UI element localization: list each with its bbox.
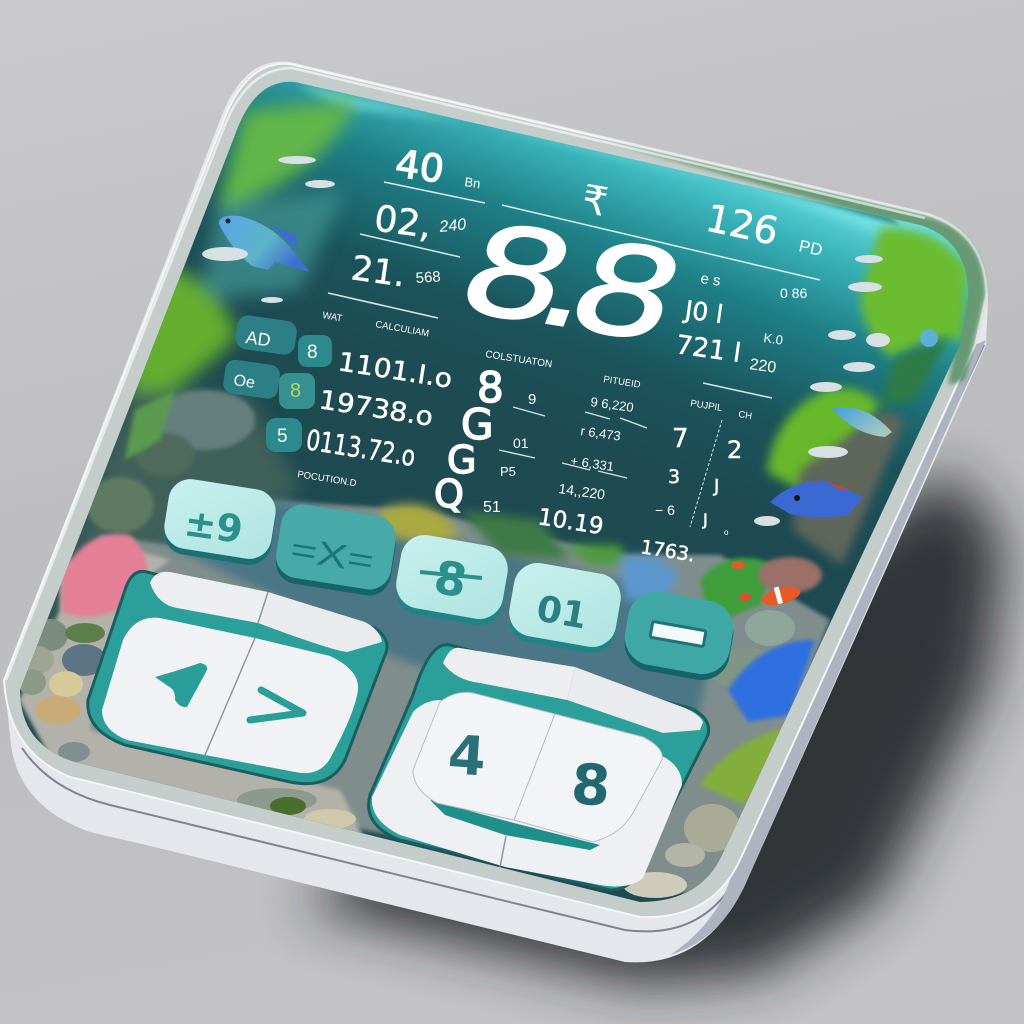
display readouts: 7	[672, 424, 689, 454]
floor	[20, 500, 830, 900]
display readouts: 2	[727, 436, 742, 464]
top row buttons	[161, 476, 738, 684]
lower surround key	[372, 700, 682, 886]
display readouts: 10.19	[536, 504, 605, 540]
display readouts: 14,,220	[558, 480, 606, 503]
display readouts: 0 86	[780, 285, 807, 301]
plants top left	[20, 100, 355, 690]
left arrow glyph	[155, 663, 207, 707]
display readouts	[297, 141, 824, 566]
display readouts: Q	[434, 472, 464, 516]
display readouts: Bn	[464, 174, 481, 191]
left keypad	[88, 571, 387, 784]
display readouts: PITUEID	[603, 374, 641, 391]
display readouts: 1763.	[639, 536, 696, 566]
display readouts: 721 l	[674, 330, 743, 369]
surface ripples	[295, 82, 930, 235]
display readouts: 51	[483, 499, 501, 516]
green and yellow plants mid	[380, 504, 680, 605]
display readouts: 126	[702, 196, 782, 254]
label 4: 4	[446, 723, 488, 789]
display readouts: o	[724, 528, 729, 537]
button: equals X equals: =X=	[288, 530, 377, 581]
display readouts: + 6,331	[570, 453, 615, 474]
display readouts: 0113.72.o	[304, 423, 418, 473]
fish top left blue	[219, 216, 310, 272]
display readouts: CH	[738, 409, 753, 422]
aquarium scene	[20, 82, 968, 902]
glass tint top right	[600, 140, 985, 385]
right rocks, corals, plants	[623, 557, 822, 898]
symbol glyph: ₹	[578, 178, 611, 225]
display readouts: 568	[415, 268, 441, 287]
display readouts: P5	[500, 464, 516, 479]
small teal keys: 5	[277, 426, 288, 447]
inner key 8	[514, 714, 662, 842]
right arrow glyph	[250, 690, 303, 720]
display readouts: 220	[748, 356, 777, 377]
keypad frame	[369, 645, 709, 890]
drop shadow	[300, 470, 1005, 985]
display readouts: 9 6,220	[590, 394, 635, 415]
display readouts: 9	[528, 391, 536, 408]
button: 8	[392, 531, 512, 629]
button: plus-minus 9: ±9	[182, 500, 246, 552]
label 8: 8	[569, 752, 612, 820]
button: plus-minus 9	[161, 476, 279, 568]
small teal keys: 8	[307, 342, 318, 363]
blue-grey centre floor	[162, 496, 710, 714]
teal inner band	[430, 800, 600, 850]
small teal keys: AD	[244, 327, 272, 350]
keypad frame	[88, 571, 387, 784]
right side readouts: e s	[699, 270, 722, 290]
display readouts: J0 l	[681, 295, 725, 329]
display readouts: J	[702, 510, 708, 529]
display readouts: POCUTION.D	[297, 469, 357, 489]
clownfish	[731, 561, 802, 609]
left rocks	[86, 390, 255, 533]
display readouts: 02,	[372, 198, 434, 247]
main value: 8.8	[439, 198, 704, 370]
sand	[20, 551, 366, 834]
small teal keys	[222, 314, 332, 452]
base side rim line	[22, 345, 984, 931]
display readouts: 240	[438, 216, 467, 236]
small silver fish	[202, 156, 938, 526]
top readouts: 40	[393, 141, 447, 192]
top right key	[567, 667, 703, 733]
display readouts: COLSTUATON	[485, 349, 553, 371]
display readouts: G	[447, 438, 476, 482]
button: 8: 8	[430, 550, 471, 608]
display readouts: J	[713, 476, 719, 497]
small teal keys: Oe	[232, 372, 256, 392]
display readouts: 21.	[349, 248, 408, 295]
right key	[205, 638, 358, 773]
small teal keys: 8	[290, 380, 301, 402]
bottom key divider	[500, 836, 506, 867]
display readouts: − 6	[655, 502, 675, 518]
glass edge	[4, 64, 986, 917]
glass highlight	[6, 68, 925, 680]
fish right blue large	[770, 481, 863, 517]
display readouts: K.0	[763, 330, 784, 348]
coral pink	[62, 534, 148, 617]
display readouts: G	[461, 400, 494, 449]
button: 01	[505, 559, 625, 657]
display readouts: PD	[797, 236, 824, 260]
base shaded right side	[670, 340, 986, 955]
display readouts: CALCULIAM	[374, 319, 430, 339]
button: 01: 01	[533, 588, 590, 638]
button: minus	[620, 587, 738, 684]
top left key	[150, 572, 268, 623]
plants right	[767, 228, 968, 565]
display readouts: PUJPIL	[690, 398, 723, 414]
top right key	[258, 592, 382, 652]
button: equals X equals	[273, 501, 399, 599]
display readouts: r 6,473	[580, 423, 622, 444]
display readouts: 01	[513, 435, 529, 451]
display readouts: 3	[668, 466, 680, 488]
pebbles	[18, 619, 356, 829]
top left key	[443, 648, 575, 700]
fish right top blue	[832, 407, 892, 437]
divider lines	[328, 182, 820, 398]
column labels: WAT	[321, 310, 343, 324]
left key	[102, 618, 255, 755]
display readouts: 19738.o	[317, 385, 435, 433]
numeric columns: 1101.I.o	[336, 347, 454, 395]
inner key 4	[413, 692, 555, 820]
right keypad	[369, 645, 709, 890]
water	[20, 82, 968, 902]
display readouts: 8	[477, 363, 504, 412]
